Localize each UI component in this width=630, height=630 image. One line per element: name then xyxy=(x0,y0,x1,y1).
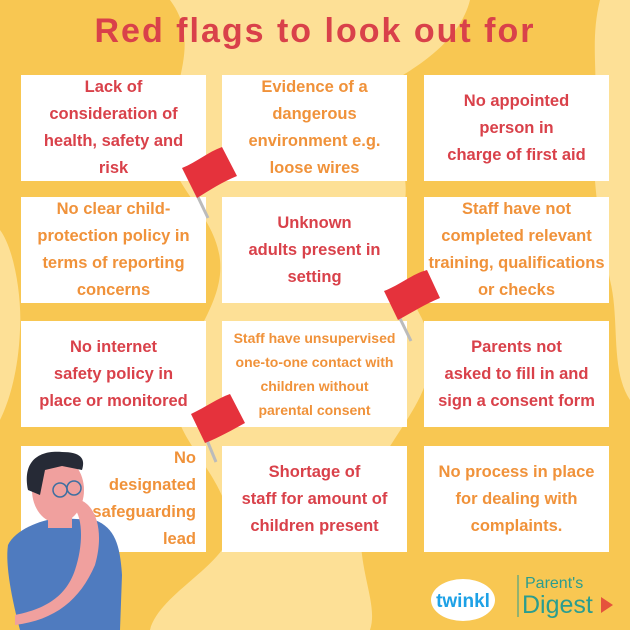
panel: row1 col1 xyxy=(21,75,206,181)
panel: row1 col3: person in xyxy=(479,118,554,136)
panel: row1 col1: Lack of xyxy=(85,78,142,96)
panel: row1 col1: consideration of xyxy=(49,105,178,123)
panel: row2 col2 xyxy=(222,197,407,303)
panel: row1 col2: environment e.g. xyxy=(248,132,381,150)
panel: row4 col1: safeguarding xyxy=(92,503,196,521)
panel: row3 col1: place or monitored xyxy=(39,392,188,410)
panel: row1 col2: dangerous xyxy=(272,105,357,123)
panel: row4 col2: children present xyxy=(250,516,379,534)
icon: flag 2 xyxy=(384,270,440,341)
panel: row4 col3: complaints. xyxy=(471,516,562,534)
panel: row2 col3: or checks xyxy=(478,281,555,299)
panel: row1 col2 xyxy=(222,75,407,181)
panel: row3 col2: Staff have unsupervised xyxy=(234,330,395,346)
panel: row2 col1: protection policy in xyxy=(37,227,190,245)
panel: row2 col1 xyxy=(21,197,206,303)
panel: row4 col2 xyxy=(222,446,407,552)
panel: row1 col3: No appointed xyxy=(464,92,569,110)
panel: row2 col3: completed relevant xyxy=(441,227,592,245)
panel: row2 col3 xyxy=(424,197,609,303)
panel: row4 col1: designated xyxy=(109,476,196,494)
panel: row2 col3: Staff have not xyxy=(462,200,571,218)
panel: row4 col3: No process in place xyxy=(439,462,594,480)
panel: row4 col1: lead xyxy=(163,530,196,548)
logo: twinkl: twinkl xyxy=(436,591,490,612)
panel: row3 col1: No internet xyxy=(70,338,157,356)
panel: row2 col1: No clear child- xyxy=(57,200,170,218)
panel: row2 col2: setting xyxy=(287,268,342,286)
panel: row3 col2: one-to-one contact with xyxy=(236,354,393,370)
icon: thinking man xyxy=(7,452,122,630)
panel: row2 col2: adults present in xyxy=(248,240,381,258)
icon: flag 3 xyxy=(191,394,245,462)
panel: row4 col2: Shortage of xyxy=(269,462,360,480)
panel: row3 col2: children without xyxy=(260,378,369,394)
logo: Parent's Digest: Digest xyxy=(522,591,593,619)
panel: row4 col2: staff for amount of xyxy=(242,490,387,508)
panel: row2 col3: training, qualifications xyxy=(428,254,604,272)
panel: row3 col3 xyxy=(424,321,609,427)
panel: row3 col3: asked to fill in and xyxy=(445,364,588,382)
panel: row2 col2: Unknown xyxy=(277,214,352,232)
panel: row1 col2: Evidence of a xyxy=(261,78,368,96)
panel: row1 col3 xyxy=(424,75,609,181)
logo: Parent's Digest xyxy=(518,575,613,619)
panel: row2 col1: terms of reporting xyxy=(42,254,185,272)
title: Red flags to look out for xyxy=(94,12,535,50)
panel: row4 col3 xyxy=(424,446,609,552)
panel: row3 col3: sign a consent form xyxy=(438,392,595,410)
panel: row4 col1 xyxy=(21,446,206,552)
panel: row1 col3: charge of first aid xyxy=(447,146,586,164)
panel: row1 col1: health, safety and xyxy=(44,132,183,150)
panel: row4 col1: No xyxy=(174,449,196,467)
panel: row3 col2 xyxy=(222,321,407,427)
panel: row1 col2: loose wires xyxy=(270,159,359,177)
icon: flag 1 xyxy=(182,147,237,218)
panel: row2 col1: concerns xyxy=(77,281,150,299)
panel: row1 col1: risk xyxy=(99,159,128,177)
panel: row3 col3: Parents not xyxy=(471,338,562,356)
logo: twinkl xyxy=(431,579,495,621)
panel: row3 col1: safety policy in xyxy=(54,364,173,382)
panel: row3 col1 xyxy=(21,321,206,427)
logo: Parent's Digest: Parent's xyxy=(525,575,583,592)
panel: row3 col2: parental consent xyxy=(258,402,370,418)
panel: row4 col3: for dealing with xyxy=(456,490,577,508)
